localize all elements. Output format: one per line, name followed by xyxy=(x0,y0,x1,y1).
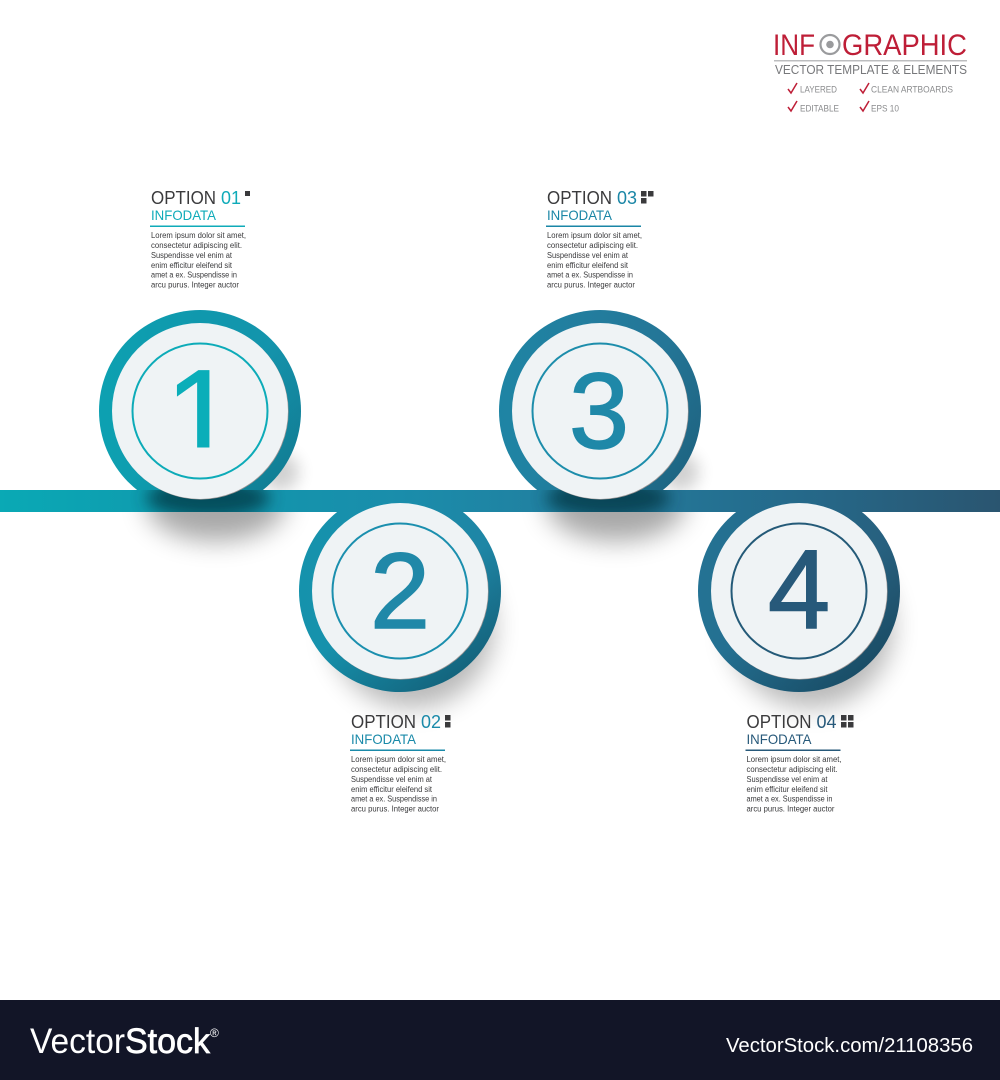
option 3 body text xyxy=(547,231,642,290)
step 4 outer ring xyxy=(698,512,900,692)
step 4 inner ring xyxy=(732,524,866,658)
option 1 body text: arcu purus. Integer auctor xyxy=(151,280,239,290)
option 4 body text: enim efficitur eleifend sit xyxy=(746,785,828,794)
step 3 disc xyxy=(512,323,689,500)
step 1 numeral: 1 xyxy=(165,342,237,488)
option 4 body text: amet a ex. Suspendisse in xyxy=(746,794,832,804)
step 3 inner ring xyxy=(532,344,668,478)
step 2 outer ring xyxy=(299,512,501,692)
option 3 body text: amet a ex. Suspendisse in xyxy=(547,270,633,280)
option 2 heading: OPTION xyxy=(351,711,416,732)
footer bar: Stock xyxy=(125,1022,210,1061)
option 1 body text: Lorem ipsum dolor sit amet, xyxy=(151,231,246,240)
option 2 body text: amet a ex. Suspendisse in xyxy=(351,794,437,804)
option 4 body text xyxy=(746,755,842,814)
logo check list: LAYERED xyxy=(800,84,837,94)
step 1 inner ring xyxy=(132,344,268,478)
footer bar: ® xyxy=(210,1026,219,1040)
option 2 body text: enim efficitur eleifend sit xyxy=(351,785,433,794)
logo check list: EDITABLE xyxy=(800,104,839,114)
infographic logo block: GRAPHIC xyxy=(842,29,967,62)
option 1 heading: OPTION xyxy=(151,187,216,208)
step 1 outer ring xyxy=(99,310,301,490)
option 1 subheading: INFODATA xyxy=(151,207,217,223)
step 1 disc xyxy=(112,323,289,500)
option 2 body text: Lorem ipsum dolor sit amet, xyxy=(351,755,446,764)
option 2 text block xyxy=(350,711,450,814)
option 2 body text: Suspendisse vel enim at xyxy=(351,775,433,784)
option 3 body text: Suspendisse vel enim at xyxy=(547,251,629,260)
option 4 body text: Lorem ipsum dolor sit amet, xyxy=(746,755,842,764)
logo O icon xyxy=(820,35,840,54)
option 2 subheading: INFODATA xyxy=(351,731,417,747)
option 3 subheading: INFODATA xyxy=(547,207,613,223)
infographic logo block xyxy=(773,29,967,114)
option 4 body text: Suspendisse vel enim at xyxy=(746,775,828,784)
logo subtitle: VECTOR TEMPLATE & ELEMENTS xyxy=(775,62,967,77)
option 3 heading: OPTION xyxy=(547,187,612,208)
step 3 medallion xyxy=(512,323,689,500)
logo check list: CLEAN ARTBOARDS xyxy=(871,84,953,94)
step 2 numeral: 2 xyxy=(370,530,430,651)
option 3 body text: consectetur adipiscing elit. xyxy=(547,241,638,250)
step 4 disc xyxy=(711,503,888,680)
logo check list xyxy=(788,83,953,114)
step 2 disc xyxy=(312,503,489,680)
step 2 inner ring xyxy=(332,524,468,658)
option 4 body text: arcu purus. Integer auctor xyxy=(746,804,835,814)
option 2 body text: arcu purus. Integer auctor xyxy=(351,804,439,814)
step 4 numeral: 4 xyxy=(768,527,830,652)
option 4 heading: OPTION xyxy=(746,711,812,732)
option 4 text block: 04 xyxy=(816,711,836,732)
option 1 text block: 01 xyxy=(221,187,241,208)
option 1 text block xyxy=(150,187,250,290)
footer bar xyxy=(0,1000,1000,1080)
step 1 medallion xyxy=(112,323,289,500)
footer logo: Vector xyxy=(30,1022,125,1061)
shadows beneath the timeline xyxy=(146,453,893,708)
option 1 body text: amet a ex. Suspendisse in xyxy=(151,270,237,280)
option 1 body text: consectetur adipiscing elit. xyxy=(151,241,242,250)
option 2 body text xyxy=(351,755,446,814)
step 2 medallion xyxy=(312,503,489,680)
option 1 body text xyxy=(151,231,246,290)
step 4 medallion xyxy=(711,503,888,680)
step 3 outer ring xyxy=(499,310,701,490)
band shading under discs xyxy=(138,490,676,512)
option 3 body text: arcu purus. Integer auctor xyxy=(547,280,635,290)
option 1 body text: Suspendisse vel enim at xyxy=(151,251,233,260)
option 4 subheading: INFODATA xyxy=(746,731,812,747)
option 4 body text: consectetur adipiscing elit. xyxy=(746,765,838,774)
option 2 text block: 02 xyxy=(421,711,441,732)
logo wordmark: INF xyxy=(773,29,815,62)
footer image id: VectorStock.com/21108356 xyxy=(726,1035,973,1057)
logo check list: EPS 10 xyxy=(871,104,899,114)
option 2 body text: consectetur adipiscing elit. xyxy=(351,765,442,774)
option 3 text block: 03 xyxy=(617,187,637,208)
option 1 body text: enim efficitur eleifend sit xyxy=(151,261,233,270)
option 4 text block xyxy=(746,711,854,814)
option 3 body text: Lorem ipsum dolor sit amet, xyxy=(547,231,642,240)
option 3 body text: enim efficitur eleifend sit xyxy=(547,261,629,270)
timeline band xyxy=(0,490,1000,512)
step 3 numeral: 3 xyxy=(569,350,629,471)
option 3 text block xyxy=(546,187,654,290)
